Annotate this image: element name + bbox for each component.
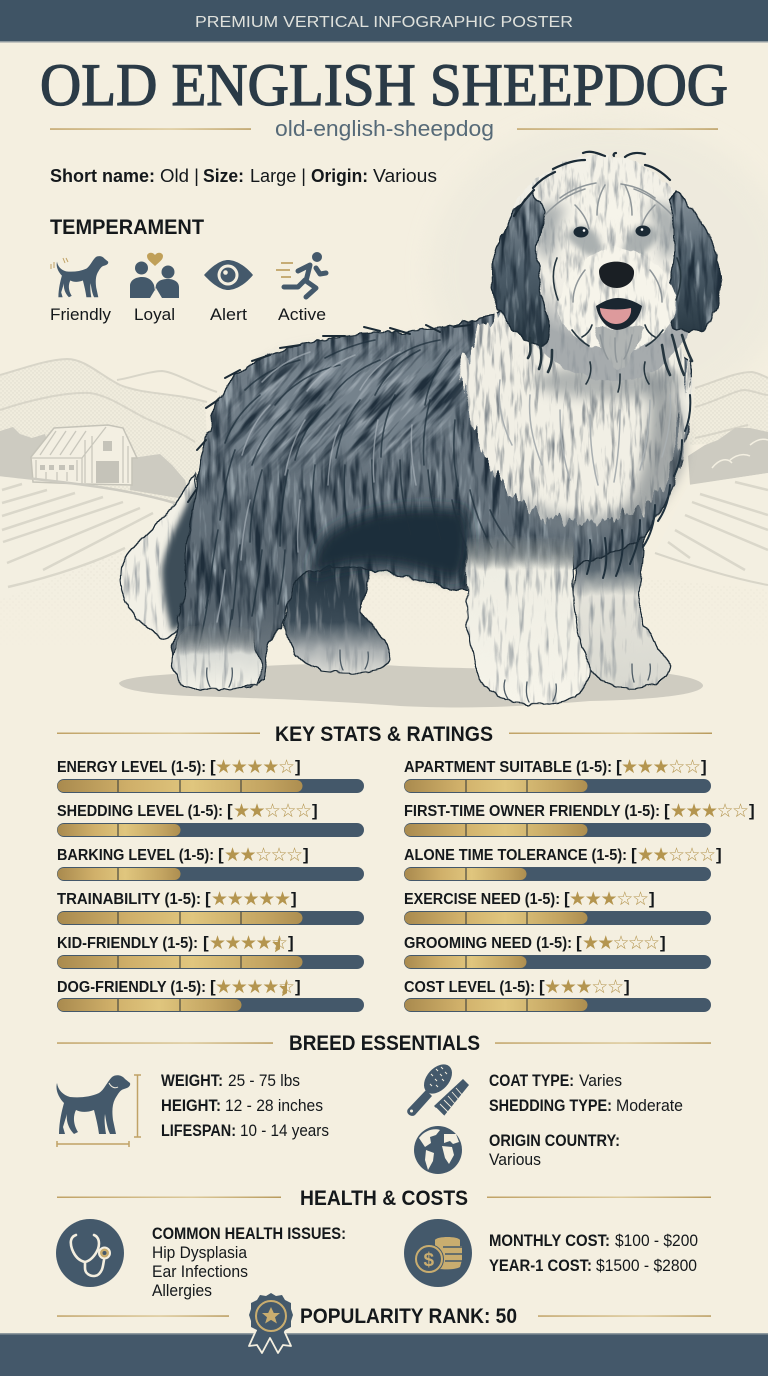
stat: apartment suitable: APARTMENT SUITABLE (1-5):: [404, 759, 612, 776]
text block: origin country: ORIGIN COUNTRY:: [489, 1132, 620, 1150]
stat: trainability: TRAINABILITY (1-5):: [57, 891, 201, 908]
stat: shedding level: ]: [312, 801, 318, 820]
text block: coat and shedding: Moderate: [616, 1097, 683, 1115]
back coat with diagonal fur: [165, 218, 539, 591]
text block: monthly and year-1 costs: MONTHLY COST:: [489, 1232, 610, 1250]
text block: coat and shedding: [489, 1072, 683, 1115]
mouth and tongue: [596, 298, 642, 330]
stat: dog-friendly: ★★★★☆: [215, 976, 295, 998]
illustration: old english sheepdog: [119, 152, 722, 704]
head base: [505, 155, 705, 381]
text block: coat and shedding: SHEDDING TYPE:: [489, 1097, 612, 1115]
footer bar: [0, 1333, 768, 1376]
text block: monthly and year-1 costs: [489, 1232, 698, 1275]
text block: short name, size, origin: Various: [373, 166, 437, 186]
stat: kid-friendly: KID-FRIENDLY (1-5):: [57, 935, 198, 952]
stat: trainability: [57, 888, 364, 925]
text block: common health issues: Allergies: [152, 1282, 212, 1300]
white chest mane: [466, 300, 688, 523]
icon: dog size diagram: [56, 1075, 141, 1147]
chest lower dark fringe: [587, 395, 690, 578]
icon: coins: [404, 1219, 472, 1287]
text block: short name, size, origin: Size:: [203, 166, 244, 186]
near front leg: [466, 535, 590, 704]
subtitle: old-english-sheepdog: [275, 116, 494, 141]
stat: alone time tolerance: [: [631, 845, 637, 864]
right ear: [667, 190, 722, 333]
text block: weight height lifespan: LIFESPAN:: [161, 1122, 236, 1140]
stat: apartment suitable: [404, 756, 711, 793]
text block: monthly and year-1 costs: $1500 - $2800: [596, 1257, 697, 1275]
stat: alone time tolerance: ALONE TIME TOLERANCE (1-5):: [404, 847, 627, 864]
face fur strokes: [553, 258, 681, 392]
stat: shedding level: [57, 800, 364, 837]
stat: apartment suitable: ★★★☆☆: [621, 756, 701, 778]
stat: exercise need: [404, 888, 711, 925]
ground shadow: [119, 664, 703, 707]
stat: cost level: ]: [624, 977, 630, 996]
stat: alone time tolerance: ]: [716, 845, 722, 864]
chest lower grey shading: [515, 490, 640, 536]
text block: weight height lifespan: [161, 1072, 329, 1140]
tail: [119, 470, 205, 640]
stat: energy level: ]: [295, 757, 301, 776]
text block: weight height lifespan: WEIGHT:: [161, 1072, 223, 1090]
stat: alone time tolerance: ★★☆☆☆: [637, 844, 716, 866]
stat: shedding level: SHEDDING LEVEL (1-5):: [57, 803, 223, 820]
text block: coat and shedding: Varies: [579, 1072, 622, 1090]
section heading: breed essentials: BREED ESSENTIALS: [289, 1032, 480, 1055]
section heading: key stats and ratings: KEY STATS & RATINGS: [275, 723, 493, 746]
back edge fur spikes: [188, 325, 470, 502]
text block: short name, size, origin: Short name:: [50, 166, 155, 186]
popularity rank with rule lines: POPULARITY RANK: 50: [300, 1305, 517, 1328]
stat: grooming need: GROOMING NEED (1-5):: [404, 935, 572, 952]
nose: [599, 262, 634, 288]
icon: award ribbon badge: [249, 1293, 293, 1353]
stat: first-time owner friendly: [: [664, 801, 670, 820]
stat: cost level: [404, 976, 711, 1012]
icon: alert eye: [204, 260, 253, 290]
dark belly shadow: [312, 507, 471, 579]
stat: first-time owner friendly: ★★★☆☆: [670, 800, 749, 822]
icon: active runner: [276, 252, 326, 297]
text block: common health issues: COMMON HEALTH ISSUES:: [152, 1225, 346, 1243]
stat: grooming need: [404, 932, 711, 969]
top banner: [0, 0, 768, 42]
text block: weight height lifespan: 10 - 14 years: [240, 1122, 329, 1140]
stat: energy level: [: [210, 757, 216, 776]
text block: common health issues: [152, 1225, 346, 1300]
far hind leg: [285, 560, 392, 673]
text block: short name, size, origin: Old |: [160, 166, 199, 186]
stat: grooming need: ]: [660, 933, 666, 952]
label: alert: Alert: [210, 305, 247, 324]
stat: alone time tolerance: [404, 844, 722, 881]
background landscape: hills, barn and fields: [0, 358, 768, 605]
stat: kid-friendly: ★★★★☆: [209, 932, 288, 954]
text block: short name, size, origin: [50, 166, 437, 186]
stat: shedding level: [: [227, 801, 233, 820]
far front leg: [572, 520, 670, 688]
neck shadow below head: [535, 365, 685, 399]
fur strokes on back and flank: [198, 340, 514, 650]
body coat: [173, 300, 691, 688]
stat: exercise need: ]: [649, 889, 655, 908]
stat: dog-friendly: DOG-FRIENDLY (1-5):: [57, 979, 206, 996]
stat: cost level: COST LEVEL (1-5):: [404, 979, 535, 996]
text block: weight height lifespan: 12 - 28 inches: [225, 1097, 323, 1115]
stat: barking level: [57, 844, 364, 881]
stat: exercise need: ★★★☆☆: [569, 888, 649, 910]
stat: first-time owner friendly: ]: [749, 801, 755, 820]
icon: globe: [414, 1126, 462, 1174]
icon: coins: $: [424, 1250, 434, 1271]
stat: barking level: BARKING LEVEL (1-5):: [57, 847, 214, 864]
text block: weight height lifespan: HEIGHT:: [161, 1097, 221, 1115]
hind paw: [172, 623, 261, 690]
beard: [594, 328, 646, 370]
stat: dog-friendly: [57, 976, 364, 1012]
stat: kid-friendly: [57, 932, 364, 969]
stat: apartment suitable: [: [616, 757, 622, 776]
top banner: PREMIUM VERTICAL INFOGRAPHIC POSTER: [195, 14, 573, 31]
stat: barking level: [: [218, 845, 224, 864]
stat: cost level: [: [539, 977, 545, 996]
stat: apartment suitable: ]: [701, 757, 707, 776]
eyes: [574, 226, 650, 238]
icon: friendly dog: [51, 256, 108, 297]
heading: temperament: TEMPERAMENT: [50, 216, 204, 239]
label: active: Active: [278, 305, 326, 324]
text block: short name, size, origin: Large |: [250, 166, 306, 186]
eye area shading: [566, 225, 658, 256]
stat: energy level: ENERGY LEVEL (1-5):: [57, 759, 206, 776]
text block: short name, size, origin: Origin:: [311, 166, 368, 186]
stat: kid-friendly: [: [203, 933, 209, 952]
chest grey shading: [612, 370, 684, 535]
stat: barking level: ]: [303, 845, 309, 864]
stat: kid-friendly: ]: [288, 933, 294, 952]
text block: monthly and year-1 costs: YEAR-1 COST:: [489, 1257, 592, 1275]
muzzle: [558, 247, 676, 350]
icon: stethoscope: [56, 1219, 124, 1287]
stat: energy level: [57, 756, 364, 793]
text block: origin country: [489, 1132, 620, 1169]
stat: grooming need: [: [576, 933, 582, 952]
head top spikes: [514, 152, 670, 216]
text block: weight height lifespan: 25 - 75 lbs: [228, 1072, 300, 1090]
stat: barking level: ★★☆☆☆: [224, 844, 303, 866]
title: OLD ENGLISH SHEEPDOG: [40, 52, 728, 118]
neck dark tufts: [528, 335, 692, 375]
stat: energy level: ★★★★☆: [215, 756, 295, 778]
stat: exercise need: [: [564, 889, 570, 908]
temple grey shading: [534, 205, 680, 262]
stat: dog-friendly: [: [210, 977, 216, 996]
stat: first-time owner friendly: [404, 800, 755, 837]
left ear: [492, 190, 550, 347]
stat: exercise need: EXERCISE NEED (1-5):: [404, 891, 560, 908]
icon: loyal people and heart: [130, 253, 179, 298]
section heading: health and costs: HEALTH & COSTS: [300, 1187, 468, 1210]
paw toes: [207, 650, 650, 702]
stat: dog-friendly: ]: [295, 977, 301, 996]
text block: common health issues: Ear Infections: [152, 1263, 248, 1281]
label: loyal: Loyal: [134, 305, 175, 324]
stat: shedding level: ★★☆☆☆: [233, 800, 312, 822]
text block: coat and shedding: COAT TYPE:: [489, 1072, 574, 1090]
text block: common health issues: Hip Dysplasia: [152, 1244, 248, 1262]
stat: cost level: ★★★☆☆: [544, 976, 624, 998]
text block: origin country: Various: [489, 1151, 541, 1169]
icon: brush and comb: [407, 1059, 469, 1117]
text block: monthly and year-1 costs: $100 - $200: [615, 1232, 698, 1250]
label: friendly: Friendly: [50, 305, 111, 324]
stat: trainability: ]: [291, 889, 297, 908]
stat: grooming need: ★★☆☆☆: [582, 932, 660, 954]
stat: trainability: ★★★★★: [211, 888, 291, 910]
stat: first-time owner friendly: FIRST-TIME OWNER FRIENDLY (1-5):: [404, 803, 660, 820]
stat: trainability: [: [205, 889, 211, 908]
